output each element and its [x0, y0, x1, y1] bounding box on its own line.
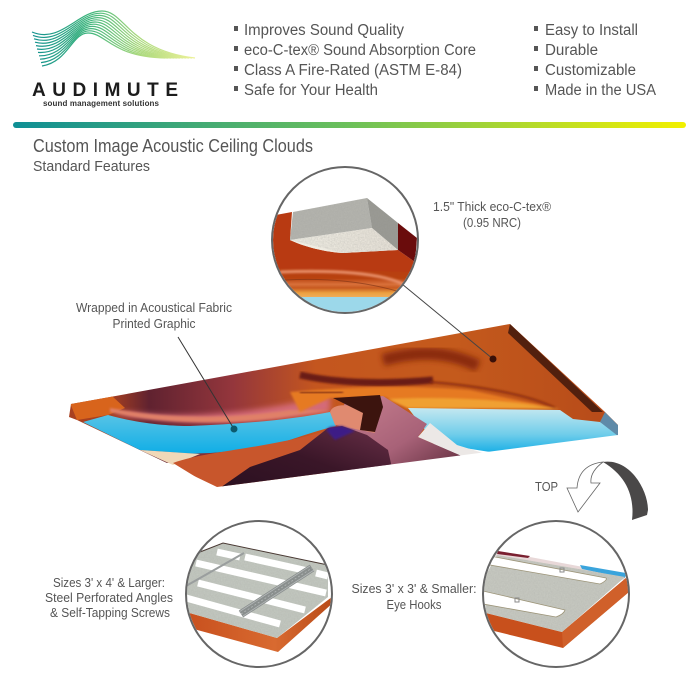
right sky	[408, 408, 625, 452]
strip lower	[483, 591, 565, 617]
lower orange rock	[173, 430, 340, 490]
subtitle: Standard Features	[33, 158, 150, 175]
eye hook lower	[515, 598, 519, 602]
foam side face	[367, 198, 398, 250]
rock head	[330, 405, 375, 433]
dark rock cap	[333, 395, 383, 432]
main ceiling cloud panel	[69, 320, 625, 490]
logo	[32, 11, 195, 108]
pink mountain	[340, 396, 462, 475]
feature list: right column	[534, 22, 657, 99]
wrapped fabric	[270, 262, 420, 298]
outline arrow	[567, 462, 603, 512]
orange edge	[186, 597, 334, 652]
dark arc	[603, 462, 648, 520]
eye hook upper	[560, 568, 564, 572]
white strips	[186, 552, 328, 624]
top right dark edge	[508, 324, 603, 412]
white rock	[418, 423, 483, 456]
back edge	[200, 543, 328, 565]
feature list: right column: Made in the USA	[545, 82, 657, 99]
callout: foam thickness	[433, 199, 551, 230]
label: small sizes: Eye Hooks	[386, 597, 442, 612]
rotation arrow	[535, 462, 648, 520]
leader line: printed graphic	[178, 337, 238, 432]
steel angle thin	[186, 553, 244, 586]
top label: TOP	[535, 479, 558, 494]
slab top	[483, 555, 625, 632]
cream canyon wedge	[140, 450, 200, 465]
feature list: left column: Class A Fire-Rated (ASTM E-84)	[244, 62, 462, 79]
panel right side	[600, 412, 618, 436]
image back edge	[495, 551, 626, 580]
label: small sizes: Sizes 3' x 3' & Smaller:	[352, 581, 476, 596]
dark corner	[398, 223, 417, 262]
steel angle main	[241, 568, 312, 614]
upper canyon area	[69, 320, 625, 470]
title: Custom Image Acoustic Ceiling Clouds	[33, 136, 313, 156]
label: large sizes: & Self-Tapping Screws	[50, 605, 170, 620]
label: small sizes	[352, 581, 476, 612]
orange edge	[486, 578, 630, 648]
circle detail: steel angles	[186, 521, 334, 667]
label: large sizes	[45, 575, 173, 620]
feature list: left column: Improves Sound Quality	[244, 22, 404, 39]
feature list: left column: Safe for Your Health	[244, 82, 378, 99]
logo wordmark: AUDIMUTE	[32, 80, 178, 101]
callout: foam thickness: (0.95 NRC)	[463, 215, 521, 230]
circle detail: eye hooks	[483, 521, 630, 667]
feature list: right column: Durable	[545, 42, 598, 59]
logo wave	[32, 11, 195, 66]
feature list: left column	[234, 22, 476, 99]
label: large sizes: Sizes 3' x 4' & Larger:	[53, 575, 165, 590]
callout: wrapped fabric label	[76, 300, 232, 331]
foam front face	[290, 198, 372, 240]
callout: wrapped fabric label: Printed Graphic	[112, 316, 196, 331]
feature list: left column: eco-C-tex® Sound Absorption Core	[244, 42, 476, 59]
callout: wrapped fabric label: Wrapped in Acoustical Fabric	[76, 300, 232, 315]
circle detail: foam core	[270, 167, 420, 317]
strip upper	[490, 556, 606, 584]
label: large sizes: Steel Perforated Angles	[45, 590, 173, 605]
callout: foam thickness: 1.5" Thick eco-C-tex®	[433, 199, 551, 214]
leader line: core	[402, 284, 496, 362]
left sky	[83, 412, 336, 453]
feature list: right column: Customizable	[545, 62, 636, 79]
foam cream interior	[290, 228, 398, 253]
gradient divider bar	[13, 122, 686, 128]
logo tagline: sound management solutions	[43, 99, 160, 108]
dark hill	[217, 426, 392, 490]
slab top	[186, 543, 328, 638]
feature list: right column: Easy to Install	[545, 22, 638, 39]
